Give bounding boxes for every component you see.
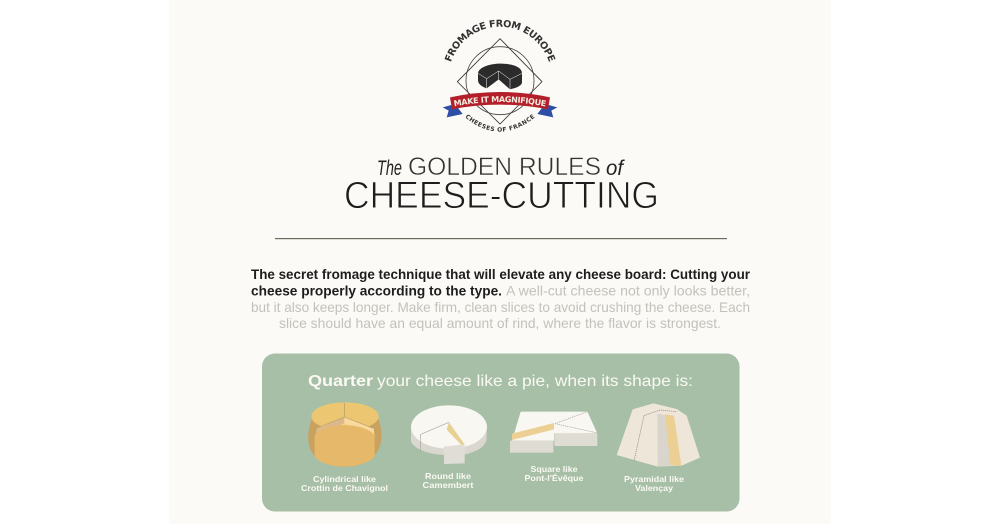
label: round: Round like (425, 471, 471, 481)
label: cylindrical: Cylindrical like (313, 474, 376, 484)
intro paragraph: slice should have an equal amount of rind, where the flavor is strongest. (279, 315, 721, 331)
title: cheese-cutting: CHEESE-CUTTING (344, 175, 659, 217)
ribbon tails (443, 104, 463, 117)
label: cylindrical (301, 474, 388, 493)
label: round (422, 471, 474, 490)
label: pyramid: Valençay (635, 483, 673, 493)
panel: quarter your cheese (262, 354, 740, 512)
intro paragraph: but it also keeps longer. Make firm, clean slices to avoid crushing the cheese. Each (251, 299, 750, 315)
intro paragraph: cheese properly according to the type. (251, 282, 502, 298)
title: script of: of (606, 157, 625, 180)
intro paragraph: The secret fromage technique that will elevate any cheese board: Cutting your (251, 266, 751, 282)
icon: square cheese (510, 412, 597, 453)
icon: cylindrical cheese (308, 402, 381, 467)
text: Cheeses of France: CHEESES OF FRANCE (466, 114, 534, 132)
panel heading: Quarter (308, 373, 373, 390)
label: pyramid: Pyramidal like (624, 474, 684, 484)
title (344, 153, 659, 217)
icon: pyramid cheese (617, 403, 700, 467)
icon: round cheese (411, 405, 487, 464)
panel heading: your cheese like a pie, when its shape is: (377, 373, 693, 390)
label: square: Square like (530, 464, 578, 474)
intro paragraph: A well-cut cheese not only looks better, (506, 282, 750, 298)
label: pyramid (624, 474, 684, 493)
icon: cheese wheel (478, 64, 522, 89)
logo: Fromage from Europe badge (442, 20, 558, 132)
label: square: Pont-l'Évêque (524, 473, 584, 483)
label: cylindrical: Crottin de Chavignol (301, 483, 388, 493)
page background (169, 0, 831, 524)
intro paragraph (251, 266, 751, 331)
title: golden rules: GOLDEN RULES (408, 153, 601, 181)
label: round: Camembert (422, 480, 474, 490)
title: script The: The (377, 157, 402, 180)
label: square (524, 464, 584, 483)
banner: Make it Magnifique: MAKE IT MAGNIFIQUE (454, 96, 546, 106)
text: Fromage from Europe: FROMAGE FROM EUROPE (444, 20, 556, 62)
